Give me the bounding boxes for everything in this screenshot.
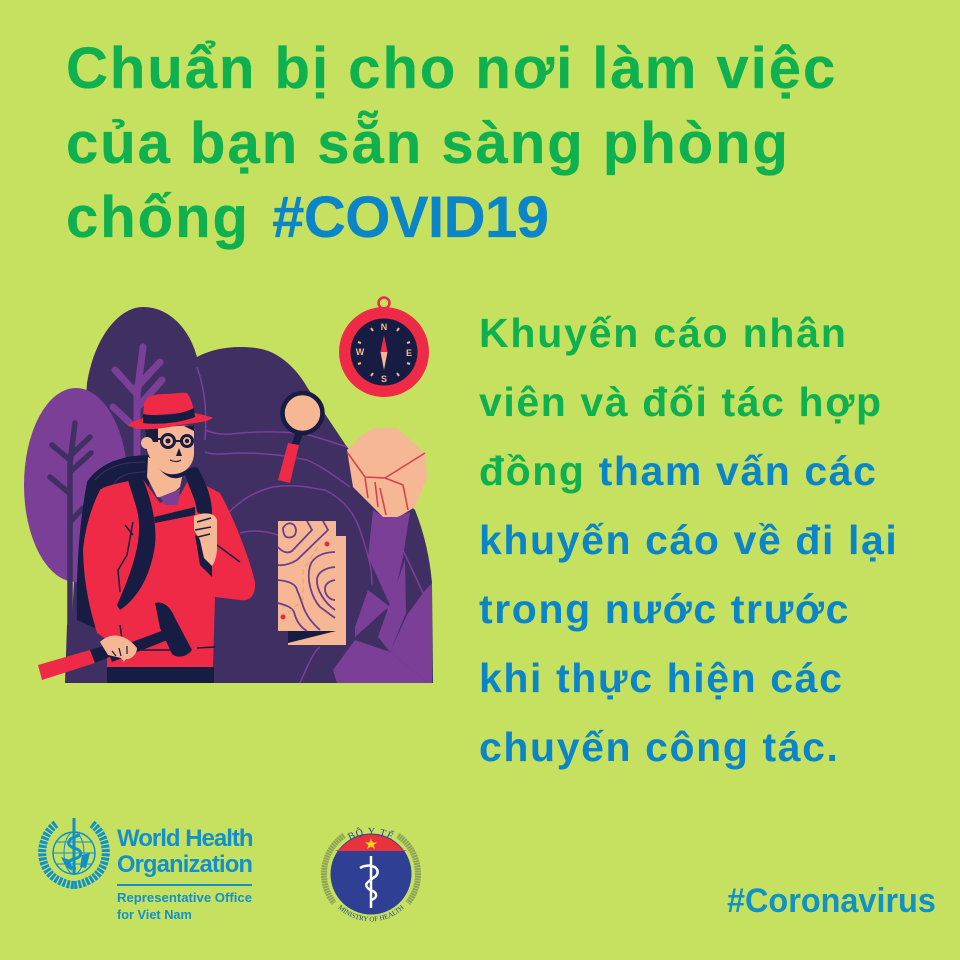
sweater bbox=[83, 477, 255, 667]
body text: Khuyến cáo nhân bbox=[479, 310, 848, 356]
front tree bbox=[24, 388, 128, 582]
Ministry of Health logo: MINISTRY OF HEALTH bbox=[338, 904, 404, 922]
body text bbox=[479, 310, 898, 770]
icon: magnifying glass bbox=[278, 393, 322, 483]
icon: compass: E bbox=[406, 348, 412, 358]
title: của bạn sẵn sàng phòng bbox=[66, 111, 790, 176]
WHO logo: Organization bbox=[117, 851, 252, 878]
hand on hammer bbox=[100, 635, 137, 662]
body text: đồng tham vấn các bbox=[479, 448, 878, 494]
hashtag: #Coronavirus bbox=[727, 882, 936, 920]
straps bbox=[117, 474, 155, 610]
map bbox=[278, 521, 346, 645]
contour lines bbox=[197, 367, 423, 683]
arm sleeve bbox=[368, 510, 410, 605]
face bbox=[147, 425, 194, 473]
dark purple hills bbox=[65, 307, 433, 683]
hiker bbox=[38, 393, 255, 683]
hand on strap bbox=[194, 513, 217, 566]
icon: compass: W bbox=[356, 347, 365, 357]
title: chống #COVID19 bbox=[66, 185, 549, 250]
body text: viên và đối tác hợp bbox=[479, 379, 883, 425]
trousers bbox=[107, 667, 214, 683]
icon: WHO emblem bbox=[38, 818, 110, 889]
Ministry of Health logo bbox=[321, 827, 421, 922]
WHO logo: Representative Office bbox=[117, 890, 252, 905]
backpack bbox=[77, 455, 150, 628]
glasses bbox=[162, 434, 192, 448]
raised fist bbox=[347, 428, 427, 518]
icon: compass: N bbox=[381, 322, 387, 332]
icon: compass bbox=[339, 298, 429, 397]
WHO logo: World Health bbox=[117, 825, 253, 852]
Ministry of Health logo: BỘ Y TẾ bbox=[347, 827, 395, 840]
WHO logo: for Viet Nam bbox=[117, 907, 192, 922]
body text: chuyến công tác. bbox=[479, 724, 840, 770]
purple body shapes bbox=[333, 560, 432, 683]
shirt and neck bbox=[147, 457, 183, 498]
hammer bbox=[108, 627, 175, 662]
title bbox=[66, 36, 837, 250]
icon: compass: S bbox=[381, 374, 387, 384]
title: Chuẩn bị cho nơi làm việc bbox=[66, 36, 837, 101]
body text: khi thực hiện các bbox=[479, 655, 844, 701]
body text: trong nước trước bbox=[479, 586, 850, 632]
body text: khuyến cáo về đi lại bbox=[479, 517, 898, 563]
hat bbox=[143, 393, 194, 416]
back tree bbox=[113, 347, 162, 470]
WHO logo bbox=[38, 818, 253, 922]
